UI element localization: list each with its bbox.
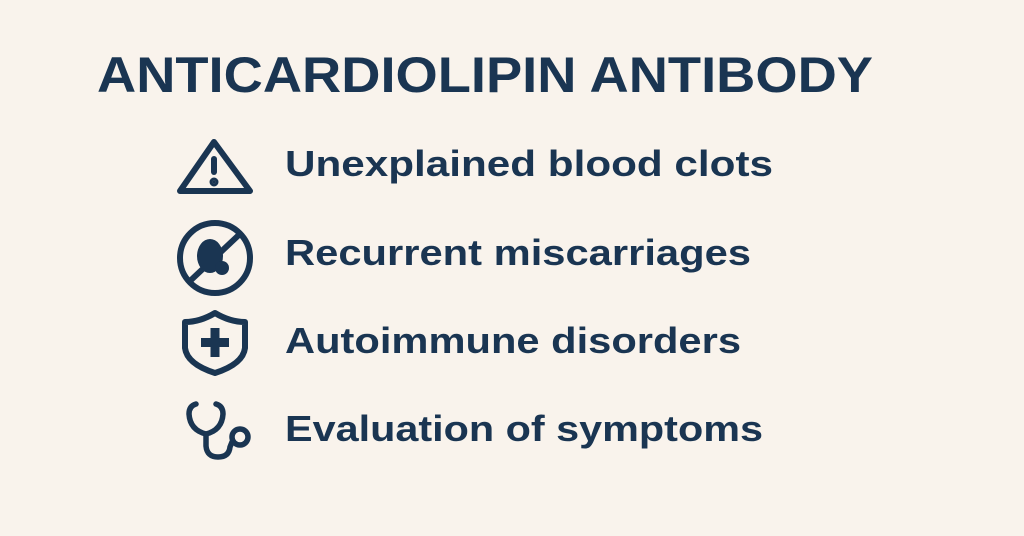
icon: no pregnancy: [180, 223, 250, 293]
item 3 text: Autoimmune disorders: [285, 320, 741, 361]
icon: stethoscope: [189, 404, 248, 457]
item 2 text: Recurrent miscarriages: [285, 232, 751, 273]
item 4 text: Evaluation of symptoms: [285, 408, 763, 449]
title: ANTICARDIOLIPIN ANTIBODY: [97, 47, 873, 103]
item 1 text: Unexplained blood clots: [285, 143, 773, 184]
icon: warning triangle: [180, 142, 250, 191]
icon: shield with cross: [185, 313, 245, 373]
